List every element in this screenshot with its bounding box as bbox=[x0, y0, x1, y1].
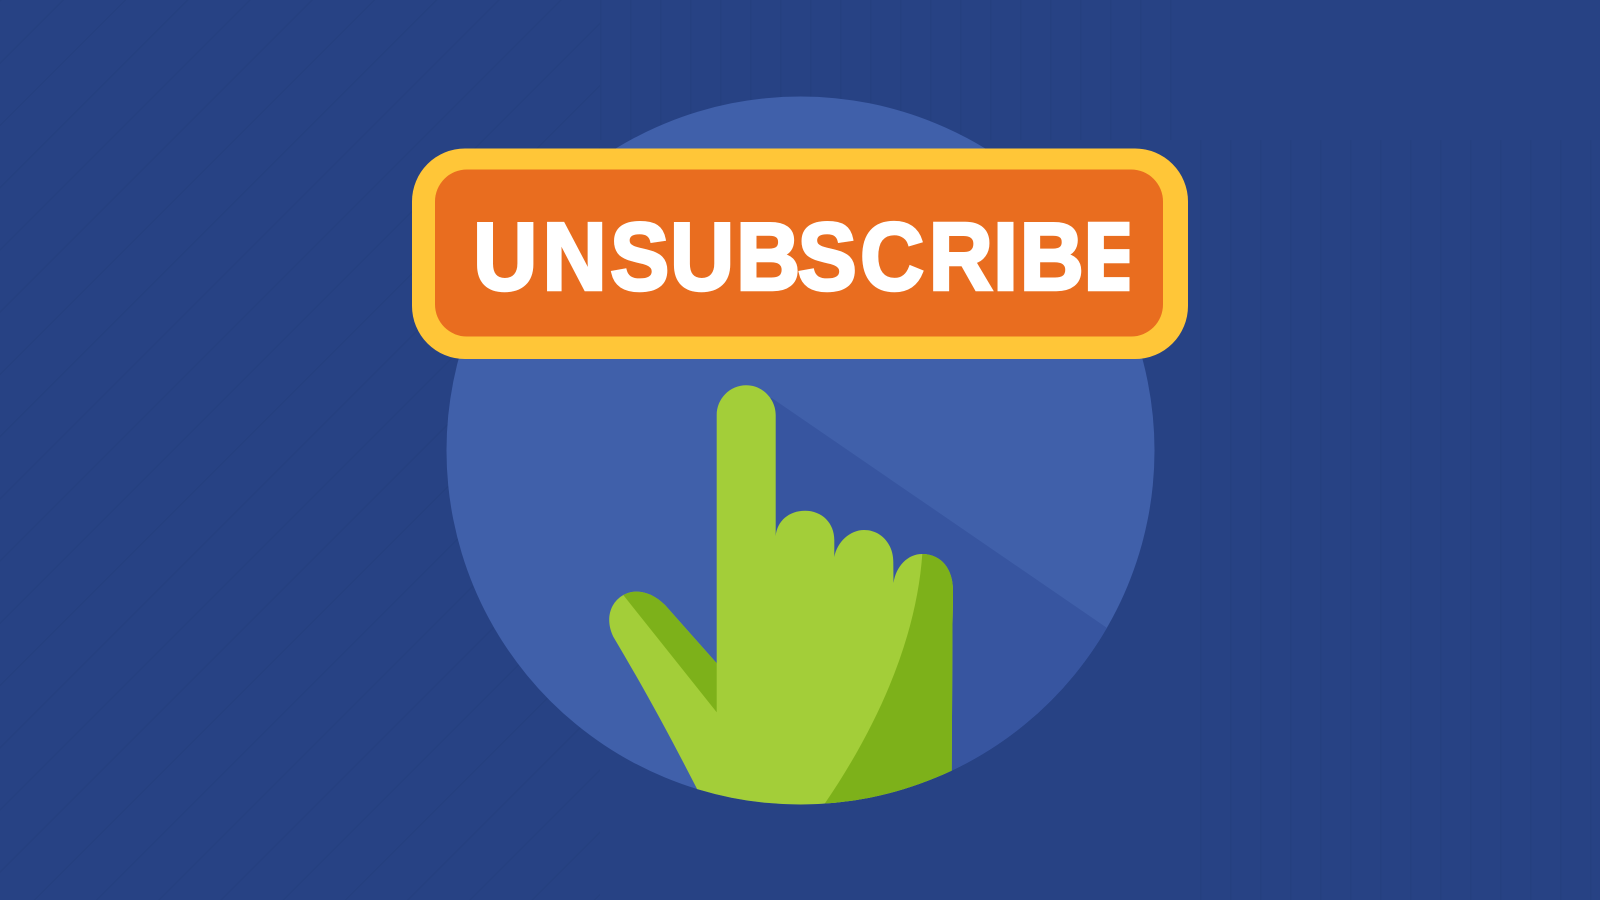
little finger and palm shading bbox=[825, 554, 953, 804]
icon: pointing hand bbox=[609, 385, 953, 820]
background circle bbox=[446, 96, 1154, 804]
button yellow border bbox=[412, 148, 1188, 359]
button orange face bbox=[435, 170, 1163, 336]
thumb shading bbox=[623, 592, 717, 712]
infographic: unsubscribe button with pointing hand bbox=[412, 96, 1188, 804]
button label: UNSUBSCRIBE bbox=[473, 203, 1142, 310]
long shadow of the hand bbox=[770, 398, 1106, 770]
unsubscribe button bbox=[412, 148, 1188, 359]
hand base shape bbox=[609, 385, 953, 820]
